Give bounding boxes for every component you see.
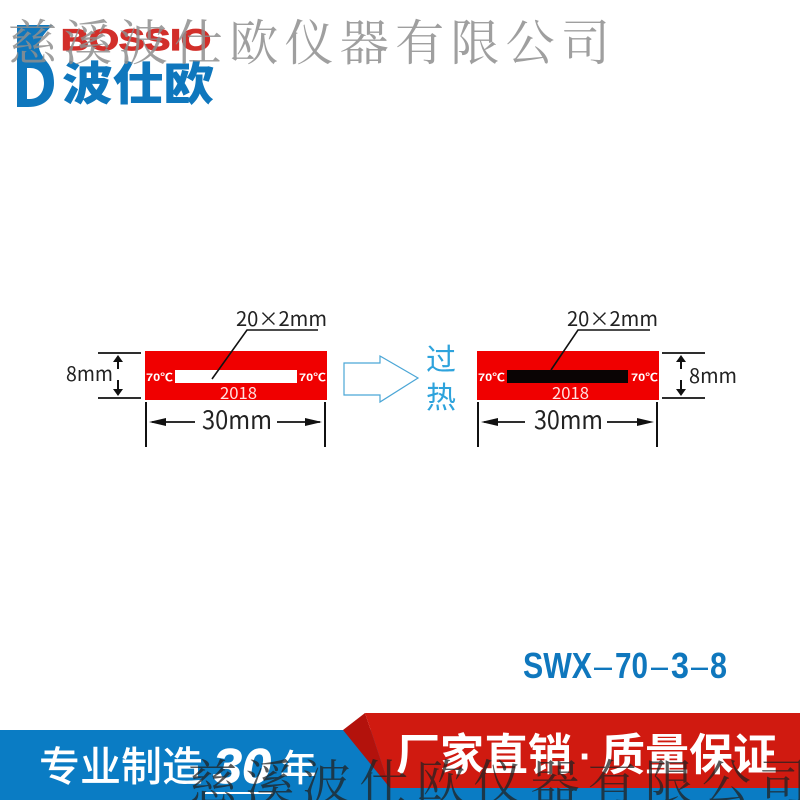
watermark: top company name: 慈溪波仕欧仪器有限公司 <box>8 5 610 75</box>
red label <box>145 351 327 400</box>
leader line and size label <box>551 303 658 370</box>
icon: logo letter D <box>17 25 54 107</box>
slogan: factory direct, quality assured: · <box>579 735 592 779</box>
leader line and size label: 20×2mm <box>236 303 327 332</box>
blue band <box>0 730 800 800</box>
overheat label <box>426 335 456 417</box>
slogan: 30 years of manufacturing <box>39 733 317 794</box>
white indicator window <box>175 370 297 383</box>
left label diagram <box>66 303 327 447</box>
black indicator window <box>507 370 628 383</box>
width dimension: 30mm <box>202 401 272 437</box>
model number: SWX <box>523 645 592 686</box>
temperature left: 70℃ <box>146 372 173 384</box>
height dimension <box>66 353 141 398</box>
red ribbon fold <box>343 713 390 788</box>
model number: – <box>691 645 708 686</box>
model number: 70 <box>615 645 648 686</box>
logo <box>17 24 214 114</box>
year: 2018 <box>552 380 589 404</box>
model number: – <box>651 645 668 686</box>
logo wordmark BOSSIO: BOSSIO <box>61 24 211 57</box>
logo Chinese name: 波仕欧 <box>62 48 214 114</box>
overheat label: 热 <box>426 373 456 417</box>
model number: – <box>594 645 612 686</box>
temperature right: 70℃ <box>299 372 326 384</box>
height dimension: 8mm <box>66 358 113 387</box>
arrow: overheat transition <box>344 356 418 402</box>
bottom banner <box>0 713 800 800</box>
slogan: factory direct, quality assured: 质量保证 <box>601 719 777 783</box>
right label diagram <box>477 303 737 447</box>
slogan: 30 years of manufacturing: 30 <box>213 740 271 794</box>
height dimension <box>662 353 737 398</box>
slogan: factory direct, quality assured: 厂家直销 <box>396 719 572 783</box>
slogan: 30 years of manufacturing: 年 <box>280 738 317 792</box>
temperature left: 70℃ <box>478 372 505 384</box>
width dimension: 30mm <box>534 401 603 437</box>
red label <box>477 351 659 400</box>
width dimension <box>478 401 657 447</box>
model number: 8 <box>710 645 727 686</box>
height dimension: 8mm <box>689 360 737 389</box>
red ribbon <box>365 713 800 788</box>
year: 2018 <box>220 380 257 404</box>
slogan: 30 years of manufacturing: 专业制造 <box>39 733 203 793</box>
width dimension <box>146 401 325 447</box>
overheat label: 过 <box>426 335 456 379</box>
model number: 3 <box>671 645 689 686</box>
model number <box>523 645 727 686</box>
leader line and size label <box>212 303 327 379</box>
leader line and size label: 20×2mm <box>567 303 658 332</box>
temperature right: 70℃ <box>631 372 658 384</box>
